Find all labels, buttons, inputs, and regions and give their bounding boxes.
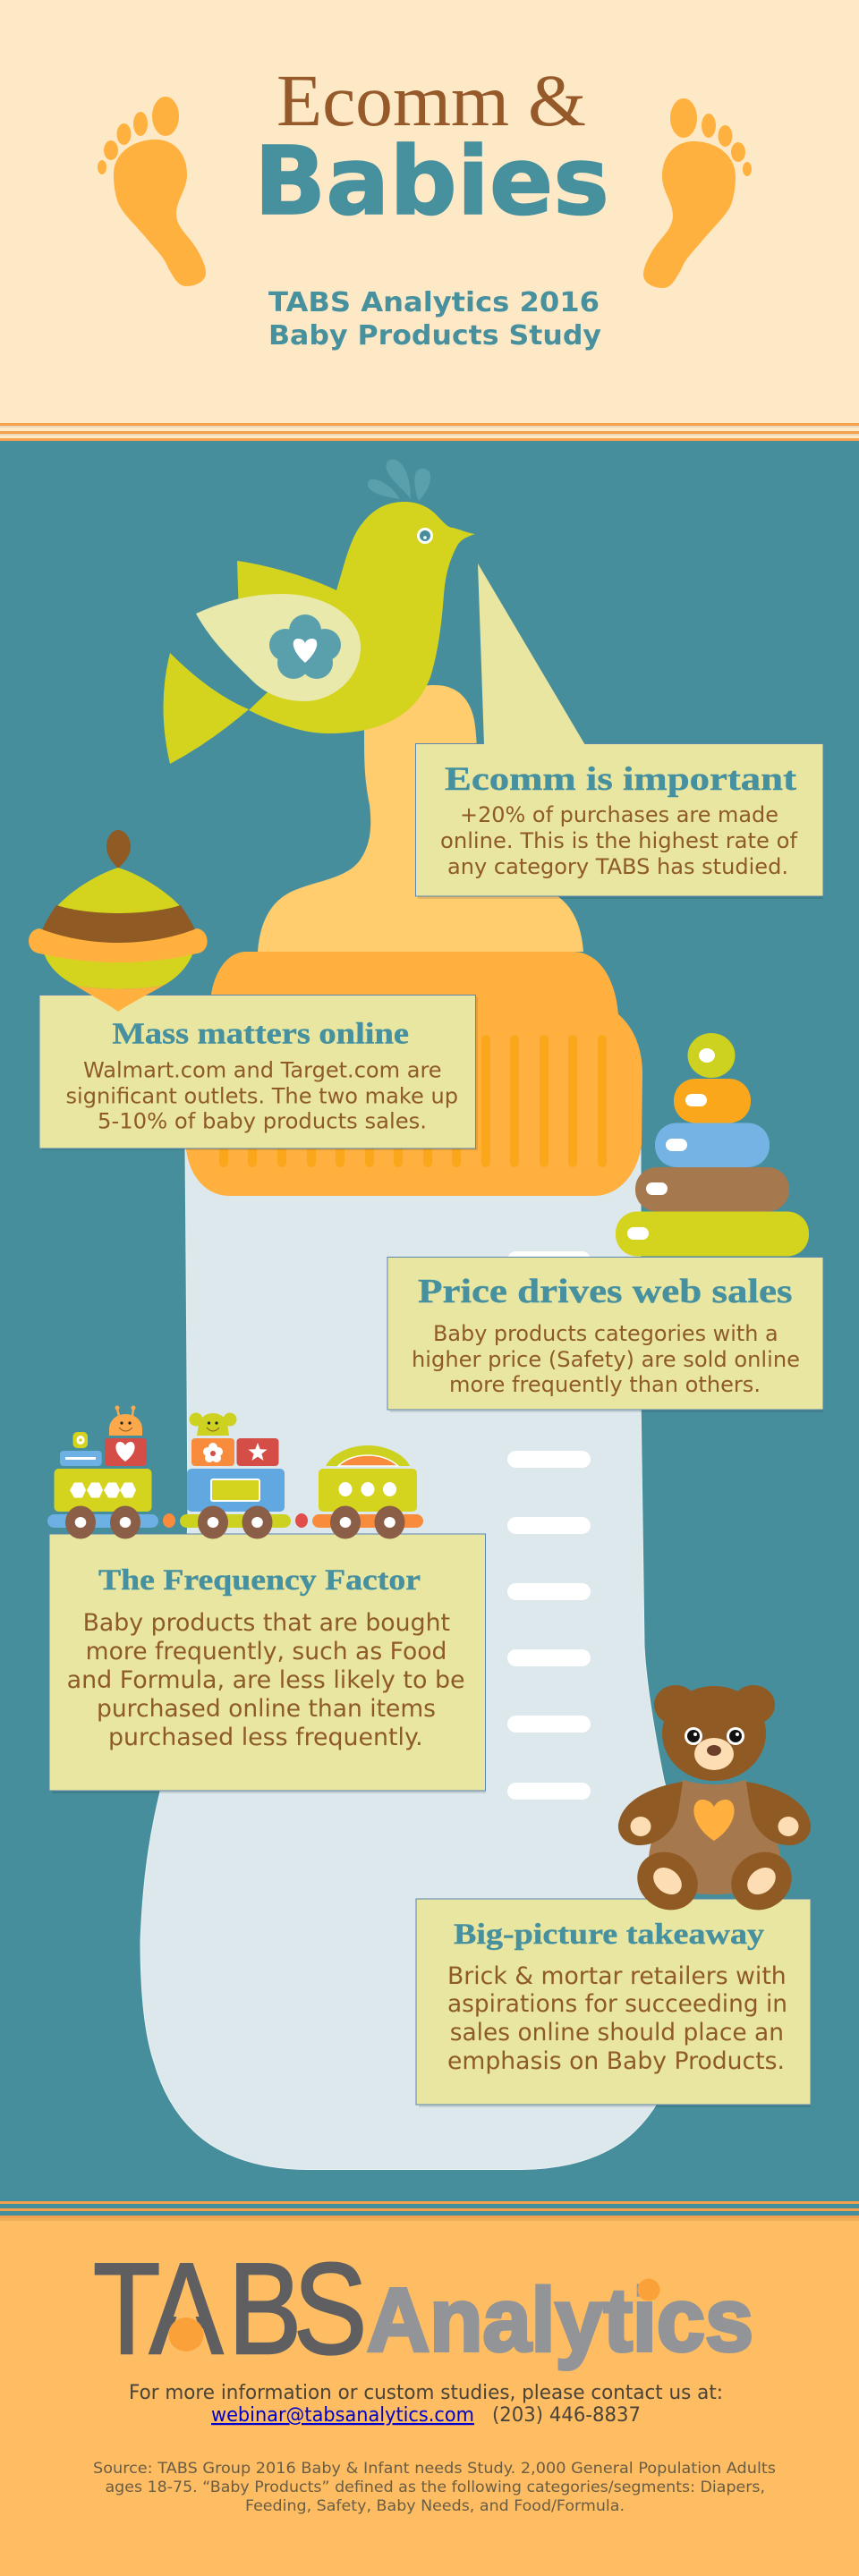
heading: Mass matters online [113, 1018, 409, 1050]
title: Babies: Babies [254, 127, 609, 236]
bird back wing [237, 561, 340, 626]
heading: The Frequency Factor [98, 1564, 421, 1597]
body text: Baby products categories with a [433, 1321, 778, 1346]
body text [447, 1962, 787, 2075]
subtitle: Baby Products Study [268, 320, 601, 352]
icon: spinning top [29, 830, 208, 1012]
body text: purchased less frequently. [108, 1724, 423, 1751]
logo: TABS Analytics: Analytics [367, 2270, 753, 2370]
icon: right foot [643, 98, 752, 288]
body text: and Formula, are less likely to be [67, 1666, 465, 1694]
contact text: For more information or custom studies, please contact us at: [129, 2382, 723, 2404]
train car 3 [312, 1445, 423, 1538]
body text: aspirations for succeeding in [447, 1990, 787, 2018]
logo: TABS Analytics [93, 2236, 753, 2381]
measurement ticks [507, 1251, 591, 1800]
train connector [295, 1513, 308, 1528]
bottle body [140, 1145, 688, 2170]
source note: Feeding, Safety, Baby Needs, and Food/Formula. [245, 2497, 625, 2515]
callout: The Frequency Factor [49, 1534, 486, 1793]
body text: any category TABS has studied. [447, 854, 788, 879]
body text: +20% of purchases are made [460, 802, 778, 827]
bird eye [417, 528, 433, 544]
body text: purchased online than items [97, 1695, 436, 1723]
icon: teddy bear [618, 1685, 811, 1921]
body text [440, 802, 798, 879]
body text: sales online should place an [450, 2019, 784, 2046]
bird body [249, 502, 475, 733]
bear arms [618, 1782, 683, 1845]
bear body [649, 1780, 780, 1894]
contact text [129, 2382, 723, 2427]
body text: higher price (Safety) are sold online [412, 1347, 800, 1372]
bear heart [693, 1800, 735, 1841]
bottle collar [186, 952, 642, 1196]
body text: Brick & mortar retailers with [447, 1962, 787, 1990]
wing heart [293, 639, 317, 663]
body text: more frequently, such as Food [86, 1638, 447, 1665]
collar ribs [219, 1035, 607, 1167]
callout: Ecomm is important [415, 564, 823, 899]
title: Ecomm &: Ecomm & [276, 59, 586, 141]
bird crest [368, 460, 430, 501]
subtitle [268, 287, 601, 352]
body text: online. This is the highest rate of [440, 828, 798, 853]
panel: footer [0, 2201, 859, 2576]
body text: emphasis on Baby Products. [447, 2047, 785, 2075]
callout: Price drives web sales [387, 1258, 823, 1412]
wing flower [269, 614, 341, 679]
body text: 5-10% of baby products sales. [98, 1109, 427, 1134]
logo: TABS Analytics: TABS [93, 2236, 367, 2381]
icon: left foot [98, 97, 206, 286]
bird tail [163, 653, 249, 764]
body text: Walmart.com and Target.com are [83, 1057, 442, 1082]
source note: ages 18-75. “Baby Products” defined as the following categories/segments: Diapers, [106, 2479, 765, 2496]
bear legs [626, 1841, 803, 1921]
bottle nipple [258, 685, 583, 952]
train car 1 [47, 1406, 158, 1538]
callout: Big-picture takeaway [416, 1899, 811, 2107]
heading: Price drives web sales [418, 1273, 793, 1310]
panel: teal background [0, 441, 859, 2218]
subtitle: TABS Analytics 2016 [268, 287, 600, 318]
icon: bird [163, 460, 475, 764]
train connector [163, 1513, 175, 1528]
body text [67, 1609, 465, 1751]
contact text: (203) 446-8837 [492, 2404, 641, 2427]
panel: header [0, 0, 859, 442]
contact text: webinar@tabsanalytics.com [211, 2404, 474, 2427]
icon: stacking rings [616, 1033, 809, 1256]
source note [93, 2460, 776, 2515]
bear head [654, 1685, 775, 1781]
icon: toy train [47, 1406, 423, 1538]
bird wing [196, 594, 361, 701]
source note: Source: TABS Group 2016 Baby & Infant needs Study. 2,000 General Population Adults [93, 2460, 776, 2478]
body text: more frequently than others. [449, 1372, 761, 1397]
heading: Big-picture takeaway [454, 1919, 765, 1951]
body text [412, 1321, 800, 1397]
body text: Baby products that are bought [83, 1609, 450, 1637]
illustration: baby bottle [140, 685, 688, 2170]
train car 2 [180, 1413, 291, 1538]
body text: significant outlets. The two make up [66, 1084, 458, 1109]
callout: Mass matters online [39, 995, 478, 1150]
heading: Ecomm is important [445, 761, 797, 798]
body text [66, 1057, 458, 1134]
